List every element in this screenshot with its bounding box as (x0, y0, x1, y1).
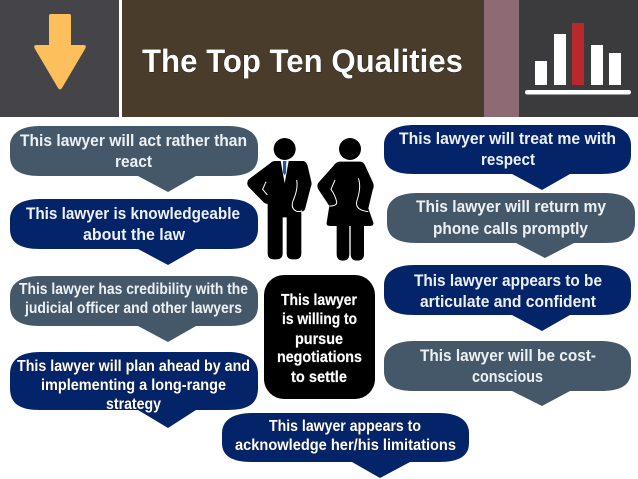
icon: woman figure (317, 138, 374, 261)
speech bubble: return phone calls: phone calls promptly (433, 220, 589, 238)
speech bubble: knowledgeable about the law: This lawyer is knowledgeable (26, 205, 240, 223)
black box: negotiations: This lawyer (281, 292, 357, 309)
speech bubble: plan ahead: implementing a long-range (41, 377, 226, 394)
speech bubble: articulate and confident: This lawyer appears to be (414, 272, 602, 290)
black box: negotiations: pursue (295, 331, 343, 348)
speech bubble: treat me with respect: respect (481, 151, 535, 169)
speech bubble: knowledgeable about the law: about the law (83, 226, 185, 244)
icon: bar chart (525, 23, 631, 94)
speech bubble: credibility (10, 276, 258, 342)
speech bubble: credibility: judicial officer and other lawyers (24, 300, 242, 317)
title: The Top Ten Qualities (142, 43, 463, 79)
speech bubble: treat me with respect (384, 125, 631, 190)
speech bubble: plan ahead: This lawyer will plan ahead by and (17, 358, 250, 375)
icon: down arrow (34, 14, 86, 90)
speech bubble: act rather than react: react (115, 153, 152, 171)
speech bubble: cost-conscious: This lawyer will be cost- (420, 347, 596, 365)
speech bubble: treat me with respect: This lawyer will treat me with (399, 130, 616, 148)
speech bubble: act rather than react (10, 126, 258, 192)
speech bubble: return phone calls: This lawyer will return my (416, 198, 607, 216)
icon: man figure (247, 138, 312, 259)
speech bubble: articulate and confident: articulate and confident (420, 293, 596, 311)
speech bubble: limitations: This lawyer appears to (269, 418, 421, 435)
speech bubble: act rather than react: This lawyer will act rather than (20, 132, 247, 150)
speech bubble: knowledgeable about the law (10, 199, 258, 265)
speech bubble: limitations (222, 413, 469, 478)
black box: negotiations (264, 275, 375, 399)
black box: negotiations: is willing to (282, 311, 357, 328)
speech bubble: articulate and confident (384, 265, 631, 331)
speech bubble: plan ahead (10, 352, 258, 428)
speech bubble: cost-conscious: conscious (472, 368, 543, 386)
speech bubble: limitations: acknowledge her/his limitations (235, 437, 456, 454)
speech bubble: credibility: This lawyer has credibility with the (19, 281, 248, 298)
black box: negotiations: to settle (291, 369, 347, 386)
header band (0, 0, 638, 117)
black box: negotiations: negotiations (277, 349, 362, 366)
speech bubble: plan ahead: strategy (106, 396, 161, 413)
speech bubble: return phone calls (387, 193, 635, 258)
speech bubble: cost-conscious (384, 341, 631, 406)
